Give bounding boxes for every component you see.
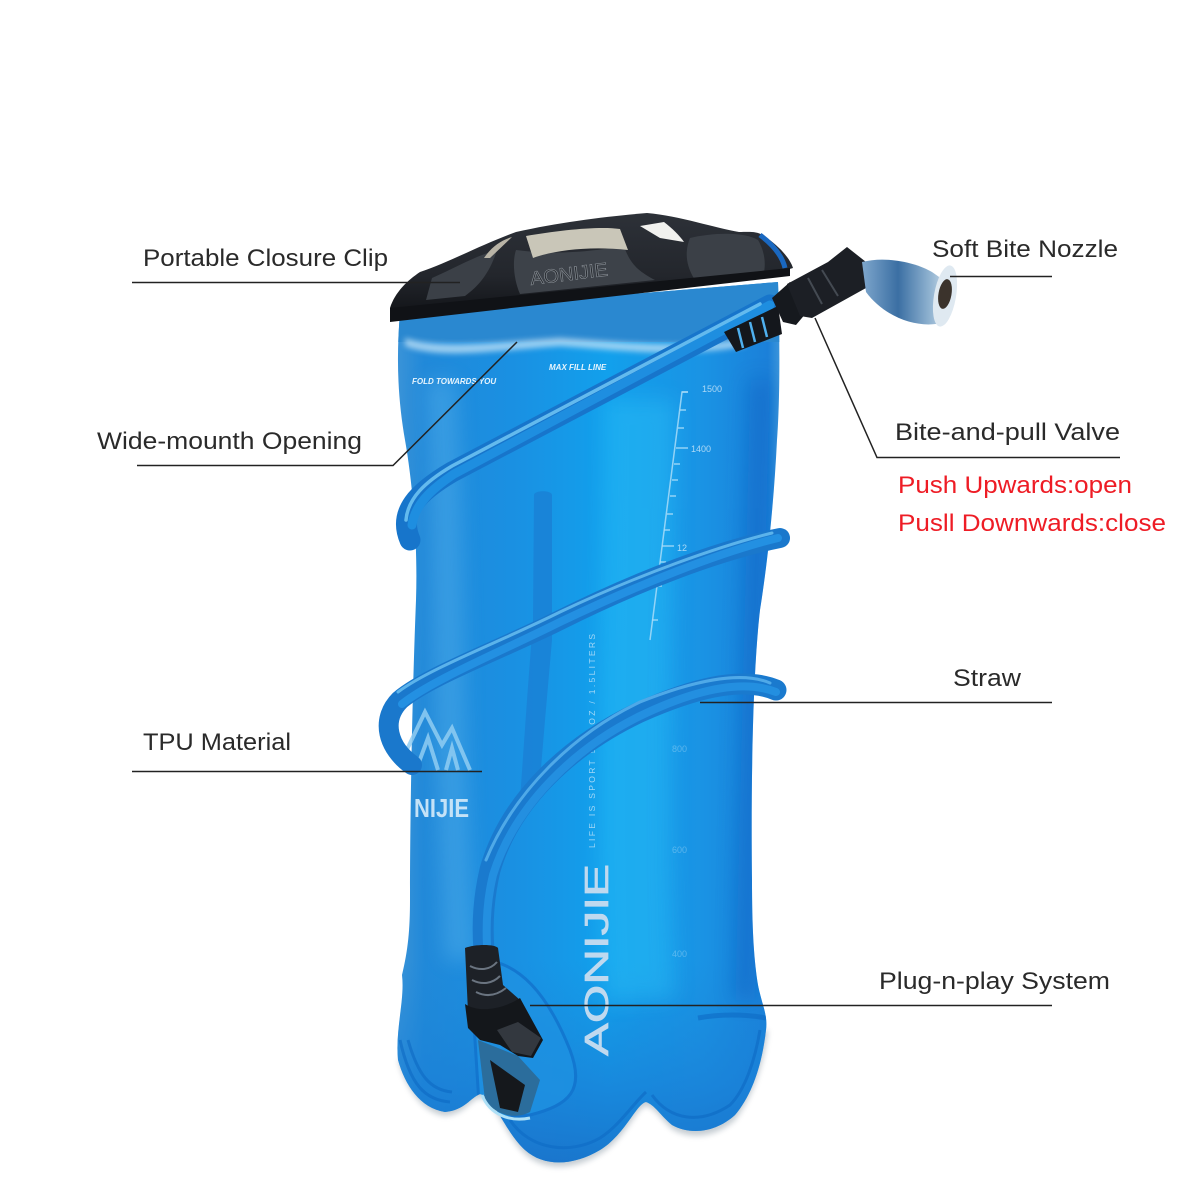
callout: plug-n-play system: Plug-n-play System bbox=[879, 968, 1110, 995]
upper coil bbox=[406, 304, 770, 540]
fill line text: MAX FILL LINE bbox=[549, 363, 607, 372]
volume scale: 1500 bbox=[702, 384, 722, 394]
callout: bite-and-pull valve: Bite-and-pull Valve bbox=[895, 419, 1120, 446]
callout: bite-and-pull valve bbox=[815, 318, 1120, 458]
bladder shadow bbox=[398, 1030, 768, 1167]
plug-n-play connector bbox=[465, 945, 543, 1119]
callout: soft bite nozzle: Soft Bite Nozzle bbox=[932, 236, 1118, 263]
bottom lobes bbox=[400, 1015, 766, 1148]
fill line text: FOLD TOWARDS YOU bbox=[412, 377, 496, 386]
volume scale bbox=[650, 384, 722, 959]
valve instructions bbox=[898, 472, 1166, 537]
bladder body bbox=[390, 280, 785, 1170]
soft bite nozzle bbox=[724, 247, 961, 352]
volume scale: 400 bbox=[672, 949, 687, 959]
fill line text bbox=[412, 363, 607, 386]
vertical brand: AONIJIE bbox=[578, 864, 615, 1056]
callout: wide-mouth opening: Wide-mounth Opening bbox=[97, 428, 362, 455]
closure clip: AONIJIE bbox=[529, 260, 609, 290]
volume scale: 800 bbox=[672, 744, 687, 754]
clip windows bbox=[526, 228, 628, 258]
straw coils bbox=[389, 304, 780, 950]
callout: straw: Straw bbox=[953, 665, 1021, 692]
volume scale: 600 bbox=[672, 845, 687, 855]
callout: wide-mouth opening bbox=[97, 342, 517, 466]
callout: portable closure clip: Portable Closure Clip bbox=[143, 245, 388, 272]
logo mark bbox=[402, 712, 470, 823]
callout: TPU material: TPU Material bbox=[143, 729, 291, 756]
weld seam bbox=[520, 491, 552, 800]
middle coil bbox=[389, 533, 780, 765]
illustration: water bladder bbox=[389, 213, 961, 1170]
volume scale: 12 bbox=[677, 543, 687, 553]
valve instructions: Pusll Downwards:close bbox=[898, 510, 1166, 537]
vertical slogan: LIFE IS SPORT 50FLOZ / 1.5LITERS bbox=[587, 634, 597, 848]
valve instructions: Push Upwards:open bbox=[898, 472, 1132, 499]
clip side panels bbox=[514, 246, 655, 294]
logo mark: NIJIE bbox=[414, 793, 469, 823]
closure clip bbox=[390, 213, 793, 322]
lower coil bbox=[483, 678, 776, 950]
printed markings bbox=[402, 363, 722, 1056]
volume scale: 1400 bbox=[691, 444, 711, 454]
